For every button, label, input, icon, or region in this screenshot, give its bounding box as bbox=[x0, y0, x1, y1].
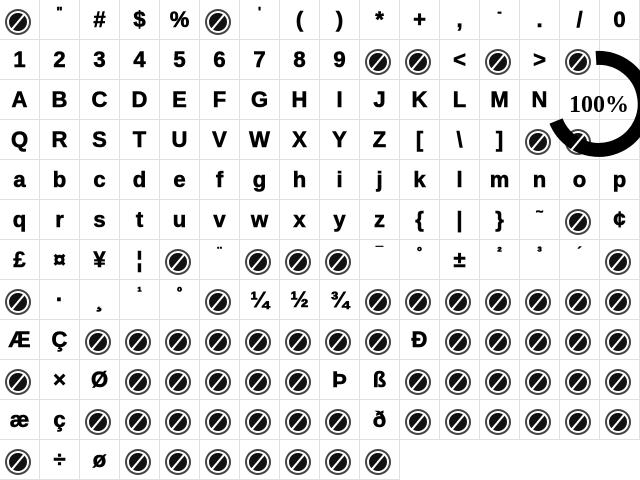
glyph grid: q bbox=[13, 206, 26, 232]
glyph grid: Ø bbox=[91, 366, 108, 392]
glyph grid: * bbox=[375, 6, 384, 32]
glyph grid: J bbox=[373, 86, 386, 112]
glyph grid: | bbox=[456, 206, 463, 232]
glyph grid: ¤ bbox=[53, 246, 66, 272]
glyph grid: > bbox=[533, 46, 546, 72]
glyph grid: D bbox=[132, 86, 147, 112]
glyph grid: Þ bbox=[332, 366, 347, 392]
glyph grid: ç bbox=[53, 406, 66, 432]
glyph grid: ´ bbox=[577, 244, 582, 259]
glyph grid: w bbox=[251, 206, 268, 232]
glyph grid: - bbox=[497, 4, 502, 19]
glyph grid: u bbox=[173, 206, 186, 232]
glyph grid: p bbox=[613, 166, 626, 192]
glyph grid: t bbox=[136, 206, 143, 232]
glyph grid: ¸ bbox=[96, 286, 103, 312]
glyph grid: 5 bbox=[173, 46, 186, 72]
glyph grid: \ bbox=[456, 126, 463, 152]
glyph grid: c bbox=[93, 166, 106, 192]
glyph grid: y bbox=[333, 206, 346, 232]
glyph grid: ½ bbox=[290, 286, 309, 312]
glyph grid: 6 bbox=[213, 46, 226, 72]
glyph grid: F bbox=[213, 86, 226, 112]
glyph grid: ¨ bbox=[217, 244, 222, 259]
glyph grid: { bbox=[415, 206, 424, 232]
glyph grid: £ bbox=[13, 246, 26, 272]
glyph grid: 3 bbox=[93, 46, 106, 72]
glyph grid: T bbox=[133, 126, 146, 152]
glyph grid: I bbox=[336, 86, 343, 112]
glyph grid: × bbox=[53, 366, 66, 392]
glyph grid: k bbox=[413, 166, 426, 192]
glyph grid: æ bbox=[10, 406, 29, 432]
glyph grid: [ bbox=[416, 126, 423, 152]
glyph grid: G bbox=[251, 86, 268, 112]
glyph grid: ¥ bbox=[93, 246, 106, 272]
glyph grid: ² bbox=[497, 244, 502, 259]
glyph grid: ~ bbox=[536, 204, 543, 219]
glyph grid: e bbox=[173, 166, 186, 192]
glyph grid: Y bbox=[332, 126, 347, 152]
glyph grid: / bbox=[576, 6, 583, 32]
glyph grid: v bbox=[213, 206, 226, 232]
glyph grid: ¹ bbox=[137, 284, 142, 299]
glyph grid: V bbox=[212, 126, 227, 152]
glyph grid: ] bbox=[496, 126, 503, 152]
glyph grid: o bbox=[573, 166, 586, 192]
glyph grid: f bbox=[216, 166, 223, 192]
glyph grid: B bbox=[52, 86, 67, 112]
glyph grid: ' bbox=[258, 4, 261, 19]
glyph grid: H bbox=[292, 86, 307, 112]
glyph grid: Ð bbox=[412, 326, 427, 352]
glyph grid: Q bbox=[11, 126, 28, 152]
glyph grid: 1 bbox=[13, 46, 26, 72]
glyph grid: h bbox=[293, 166, 306, 192]
glyph grid: m bbox=[490, 166, 509, 192]
glyph grid: W bbox=[249, 126, 270, 152]
glyph grid: l bbox=[456, 166, 463, 192]
glyph grid: ¯ bbox=[376, 244, 383, 259]
glyph grid: . bbox=[536, 6, 543, 32]
glyph grid: + bbox=[413, 6, 426, 32]
glyph grid: º bbox=[177, 284, 182, 299]
glyph grid: 0 bbox=[613, 6, 626, 32]
glyph grid: ø bbox=[93, 446, 106, 472]
glyph grid: · bbox=[56, 286, 63, 312]
glyph grid: ¼ bbox=[250, 286, 269, 312]
glyph grid: d bbox=[133, 166, 146, 192]
glyph grid: X bbox=[292, 126, 307, 152]
glyph grid: ð bbox=[373, 406, 386, 432]
glyph grid: 8 bbox=[293, 46, 306, 72]
glyph grid: ÷ bbox=[53, 446, 66, 472]
glyph grid: < bbox=[453, 46, 466, 72]
glyph grid: ¦ bbox=[136, 246, 143, 272]
glyph grid: C bbox=[92, 86, 107, 112]
glyph grid: x bbox=[293, 206, 306, 232]
glyph grid: U bbox=[172, 126, 187, 152]
glyph grid: N bbox=[532, 86, 547, 112]
glyph grid: 9 bbox=[333, 46, 346, 72]
glyph grid: # bbox=[93, 6, 106, 32]
glyph grid: 2 bbox=[53, 46, 66, 72]
glyph grid: % bbox=[170, 6, 189, 32]
glyph grid: A bbox=[12, 86, 27, 112]
glyph grid: Z bbox=[373, 126, 386, 152]
glyph grid: R bbox=[52, 126, 67, 152]
glyph grid: ± bbox=[453, 246, 466, 272]
glyph grid: z bbox=[374, 206, 385, 232]
glyph grid: E bbox=[172, 86, 187, 112]
glyph grid: ¾ bbox=[330, 286, 349, 312]
glyph grid: Æ bbox=[8, 326, 30, 352]
glyph grid: ( bbox=[296, 6, 303, 32]
glyph grid: L bbox=[453, 86, 466, 112]
glyph grid: ß bbox=[373, 366, 386, 392]
glyph grid: a bbox=[13, 166, 26, 192]
glyph grid: ) bbox=[336, 6, 343, 32]
glyph grid: K bbox=[412, 86, 427, 112]
glyph grid: g bbox=[253, 166, 266, 192]
glyph grid: S bbox=[92, 126, 107, 152]
glyph grid: s bbox=[93, 206, 106, 232]
glyph grid: ³ bbox=[537, 244, 542, 259]
glyph grid: " bbox=[56, 4, 63, 19]
glyph grid: j bbox=[376, 166, 383, 192]
glyph grid: 7 bbox=[253, 46, 266, 72]
glyph grid: 4 bbox=[133, 46, 146, 72]
percentage label: 100% bbox=[569, 92, 629, 118]
glyph grid: Ç bbox=[52, 326, 67, 352]
glyph grid: ° bbox=[417, 244, 422, 259]
glyph grid: n bbox=[533, 166, 546, 192]
glyph grid: , bbox=[456, 6, 463, 32]
glyph grid: $ bbox=[133, 6, 146, 32]
glyph grid: M bbox=[490, 86, 509, 112]
glyph grid: b bbox=[53, 166, 66, 192]
glyph grid: r bbox=[55, 206, 64, 232]
glyph grid: } bbox=[495, 206, 504, 232]
glyph grid: ¢ bbox=[613, 206, 626, 232]
glyph grid: i bbox=[336, 166, 343, 192]
